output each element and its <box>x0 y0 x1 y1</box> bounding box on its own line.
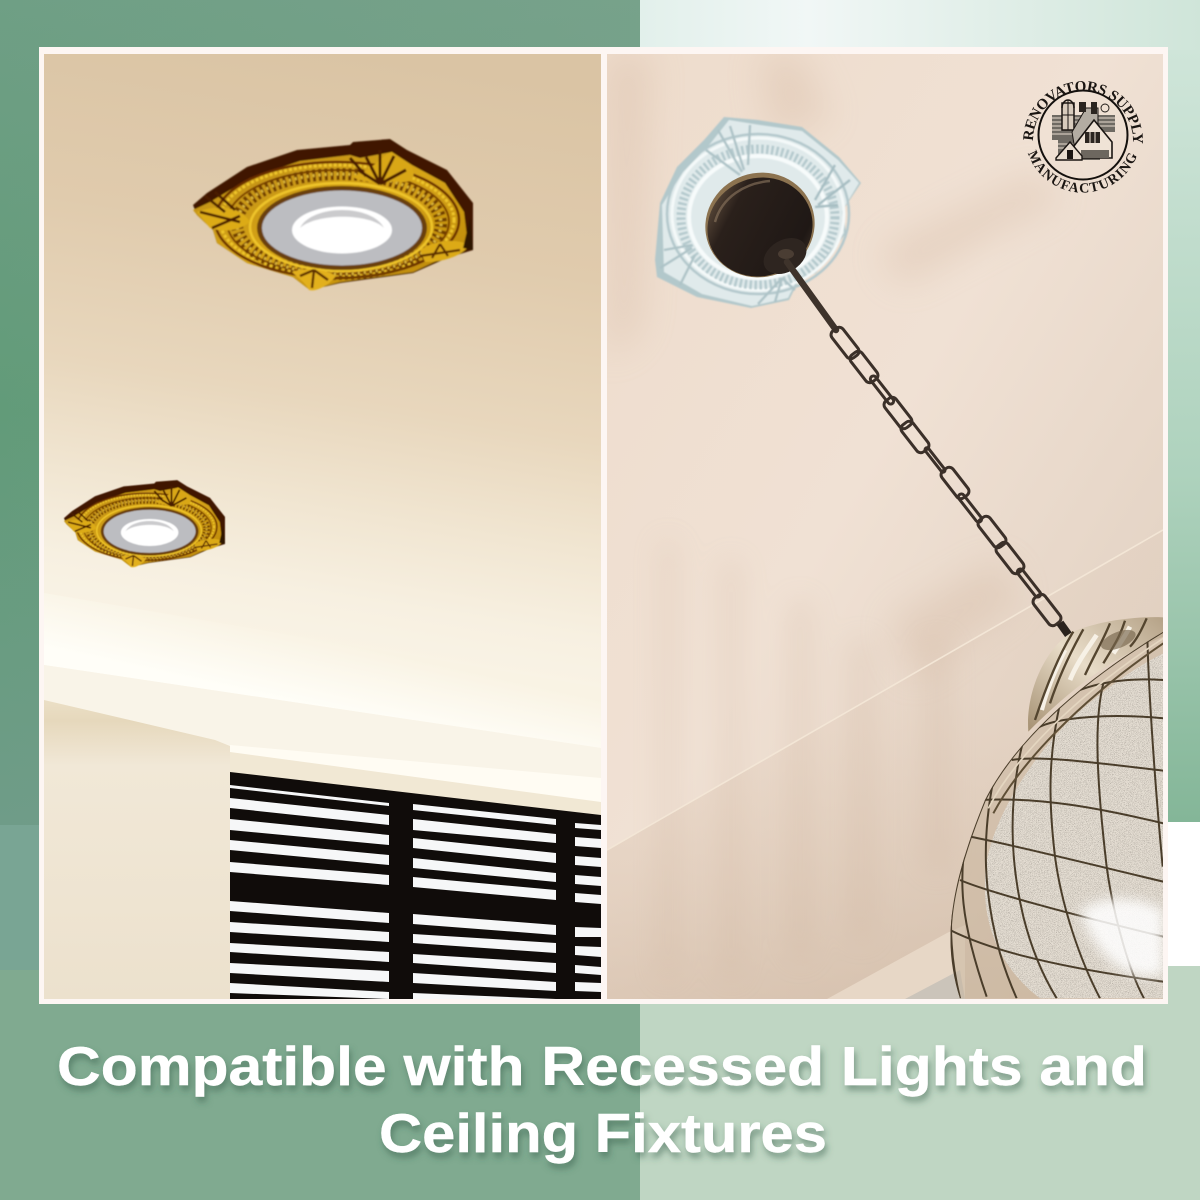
title <box>57 1035 1147 1164</box>
white photo frame <box>39 47 1168 1004</box>
background: top right block <box>640 0 1200 60</box>
panel: ceiling fixture photo <box>607 54 1163 999</box>
soft shadow streaks <box>607 54 1060 680</box>
background: lower left block <box>0 825 640 970</box>
title line 1: Compatible with Recessed Lights and <box>57 1035 1147 1097</box>
cage wires <box>950 632 1163 998</box>
ceiling surface <box>44 54 601 746</box>
metal cap <box>1028 617 1163 732</box>
logo: Renovators Supply Manufacturing <box>1023 81 1143 193</box>
logo house drawing <box>1052 100 1115 160</box>
beam above window <box>230 752 601 815</box>
panel: recessed lights photo <box>44 54 601 999</box>
background: green upper left block <box>0 0 640 825</box>
background: bottom left band <box>0 970 640 1200</box>
logo top text: RENOVATORS SUPPLY <box>1023 81 1143 144</box>
pink ceiling surface <box>607 54 1163 999</box>
vertical light streaks <box>660 540 949 980</box>
soffit ledge <box>44 665 601 800</box>
wall below ceiling line <box>607 759 1163 999</box>
white ceiling medallion <box>655 117 861 308</box>
ceiling joint line <box>607 530 1163 850</box>
mesh globe pendant <box>950 617 1163 998</box>
background: right strip <box>1160 50 1200 822</box>
small gold medallion with recessed light <box>64 480 225 567</box>
white strip above window <box>230 745 601 802</box>
hanging rod <box>787 262 836 330</box>
outer cage and glass <box>950 632 1163 998</box>
grey floor shadow at ledge <box>905 970 965 999</box>
left wall <box>44 700 230 999</box>
logo bottom text: MANUFACTURING <box>1028 150 1136 193</box>
gold rim lines <box>993 643 1163 813</box>
background: white notch on right <box>1160 822 1200 966</box>
title line 2: Ceiling Fixtures <box>379 1102 827 1164</box>
pale ledge at bottom <box>827 925 965 999</box>
cove lighting band <box>44 613 601 748</box>
window with dark blinds <box>230 772 601 999</box>
bronze canopy dome <box>705 172 815 278</box>
background: bottom right band <box>640 966 1200 1200</box>
large gold medallion with recessed light <box>193 139 473 290</box>
chain <box>829 325 1070 637</box>
